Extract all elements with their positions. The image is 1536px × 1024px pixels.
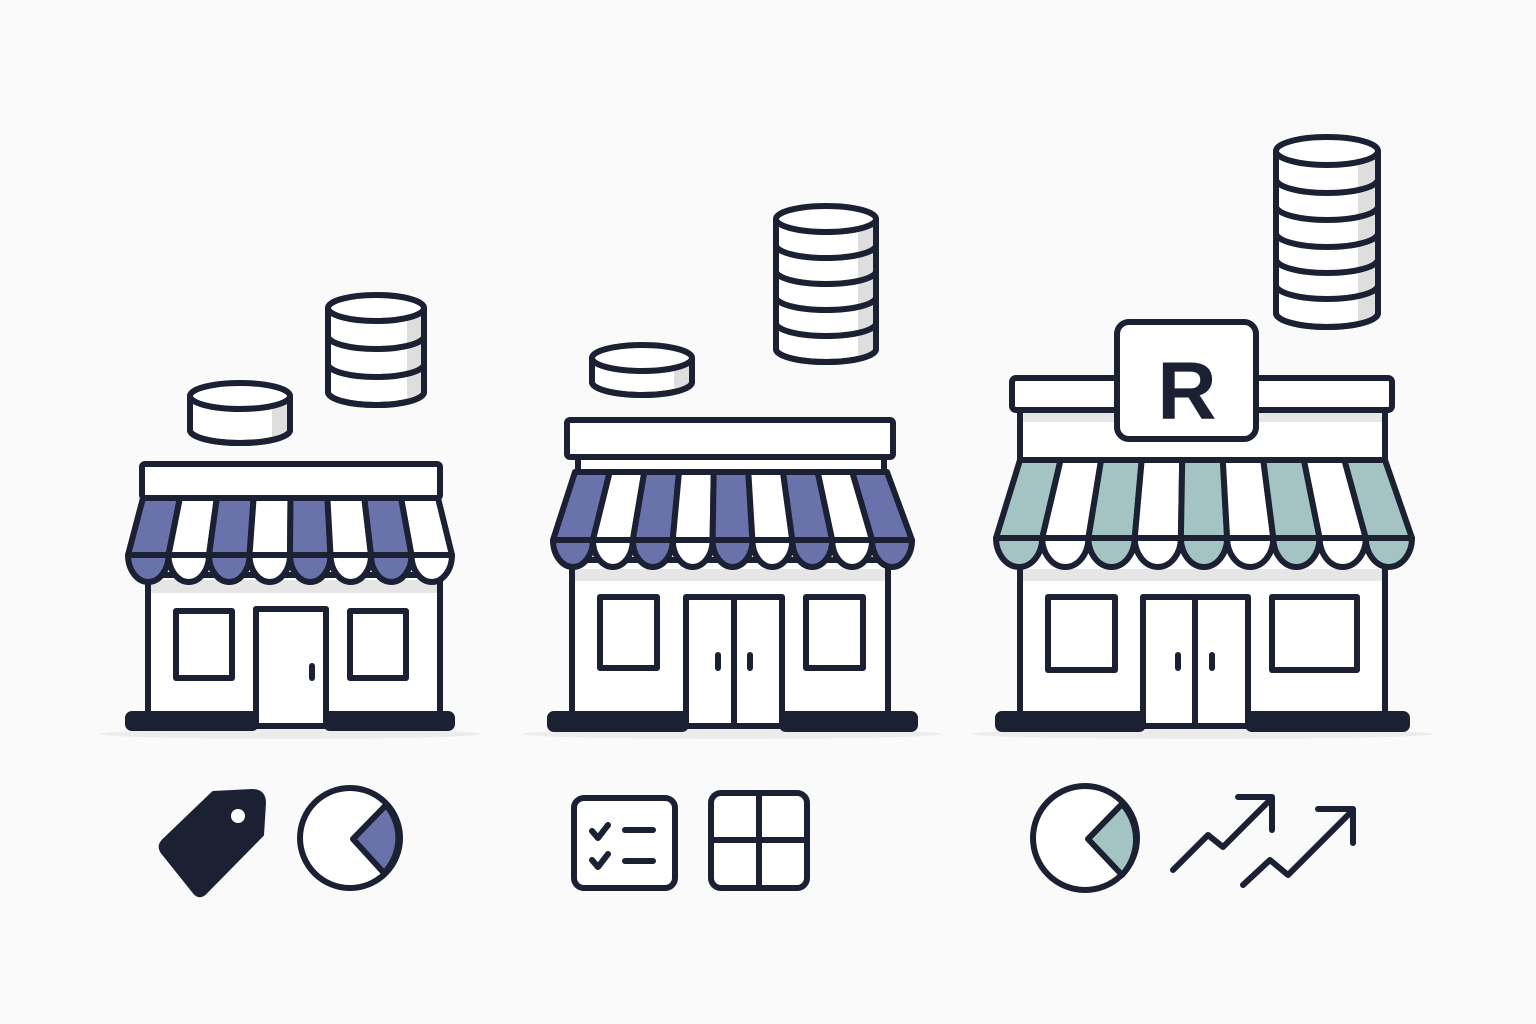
store 2: medium shop	[522, 420, 942, 739]
R sign: R	[1157, 346, 1217, 437]
top bar 3	[1012, 378, 1392, 410]
R sign	[1117, 322, 1256, 439]
coin stack: store 1 (3)	[328, 295, 427, 420]
double door 2	[686, 597, 782, 726]
coin: store 1 single	[190, 380, 292, 450]
door 1	[256, 609, 326, 726]
windows 3	[1048, 597, 1115, 670]
sign board 2	[567, 420, 893, 473]
store 1: small shop	[100, 464, 480, 739]
icon: grid	[711, 793, 807, 888]
icon: pie chart 1	[300, 788, 400, 888]
awning 2	[553, 472, 912, 567]
icon: price tag	[160, 790, 265, 896]
icon: pie chart 2	[1033, 786, 1137, 890]
coin: store 2 single	[592, 340, 694, 400]
icon: growth arrows	[1173, 797, 1353, 885]
coin stack: store 2 (5)	[776, 206, 878, 370]
windows 1	[176, 611, 232, 678]
icon: checklist	[574, 798, 675, 888]
windows 2	[600, 597, 657, 668]
coin stack: store 3 (6)	[1276, 137, 1380, 340]
sign board 1	[142, 464, 440, 498]
store 3: large branded shop	[972, 322, 1432, 739]
double door 3	[1143, 597, 1248, 726]
awning 3	[996, 460, 1412, 567]
awning 1	[128, 498, 452, 582]
